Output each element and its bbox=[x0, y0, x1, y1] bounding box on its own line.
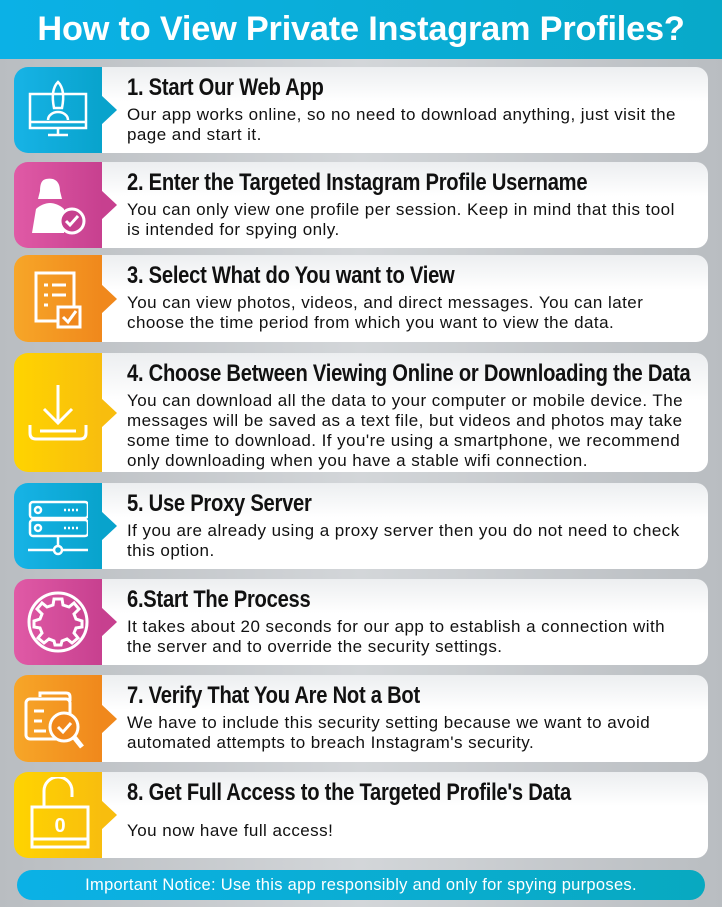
icon: download bbox=[14, 353, 102, 472]
card: step 7 text: We have to include this security setting because we want to avoid automated attempts to breach Instagram's security. bbox=[127, 713, 650, 752]
card: step 6 text bbox=[100, 579, 708, 665]
title bbox=[0, 0, 722, 59]
card: step 1 text bbox=[100, 67, 708, 153]
icon: document verify bbox=[14, 675, 102, 762]
card: step 1 text: 1. Start Our Web App bbox=[127, 74, 324, 101]
card: step 8 text: 8. Get Full Access to the Targeted Profile's Data bbox=[127, 779, 571, 806]
card: step 6 text: It takes about 20 seconds for our app to establish a connection with the server and to override the security settings. bbox=[127, 617, 665, 656]
step 2 bbox=[14, 162, 708, 248]
notice banner: Important Notice: Use this app responsibly and only for spying purposes. bbox=[85, 876, 637, 894]
icon: user check bbox=[14, 162, 102, 248]
card: step 7 text bbox=[100, 675, 708, 762]
card: step 3 text: You can view photos, videos, and direct messages. You can later choose the time period from which you want to view the data. bbox=[127, 293, 643, 332]
icon: gear bbox=[14, 579, 102, 665]
notice banner bbox=[17, 870, 705, 900]
card: step 5 text bbox=[100, 483, 708, 569]
card: step 2 text: You can only view one profile per session. Keep in mind that this tool is intended for spying only. bbox=[127, 200, 675, 239]
icon: server bbox=[14, 483, 102, 569]
icon: checklist bbox=[14, 255, 102, 342]
card: step 5 text: If you are already using a proxy server then you do not need to check this option. bbox=[127, 521, 680, 560]
step 5 bbox=[14, 483, 708, 569]
card: step 2 text: 2. Enter the Targeted Instagram Profile Username bbox=[127, 169, 587, 196]
step 1 bbox=[14, 67, 708, 153]
icon: open padlock: 0 bbox=[54, 815, 66, 837]
title: How to View Private Instagram Profiles? bbox=[37, 10, 685, 48]
card: step 4 text bbox=[100, 353, 708, 472]
card: step 3 text bbox=[100, 255, 708, 342]
step 8 bbox=[14, 772, 708, 858]
step 6 bbox=[14, 579, 708, 665]
card: step 6 text: 6.Start The Process bbox=[127, 586, 310, 613]
step 3 bbox=[14, 255, 708, 342]
card: step 7 text: 7. Verify That You Are Not a Bot bbox=[127, 682, 420, 709]
step 7 bbox=[14, 675, 708, 762]
icon: rocket monitor bbox=[14, 67, 102, 153]
card: step 4 text: You can download all the data to your computer or mobile device. The messages will be saved as a text file, but videos and photos may take some time to download. If you're using a smartphone, we recommend only downloading when you have a stable wifi connection. bbox=[127, 391, 683, 470]
card: step 5 text: 5. Use Proxy Server bbox=[127, 490, 312, 517]
step 4 bbox=[14, 353, 708, 472]
card: step 1 text: Our app works online, so no need to download anything, just visit the page and start it. bbox=[127, 105, 676, 144]
card: step 4 text: 4. Choose Between Viewing Online or Downloading the Data bbox=[127, 360, 691, 387]
icon: open padlock bbox=[14, 772, 102, 858]
card: step 2 text bbox=[100, 162, 708, 248]
card: step 8 text bbox=[100, 772, 708, 858]
card: step 8 text: You now have full access! bbox=[127, 821, 333, 840]
card: step 3 text: 3. Select What do You want to View bbox=[127, 262, 454, 289]
